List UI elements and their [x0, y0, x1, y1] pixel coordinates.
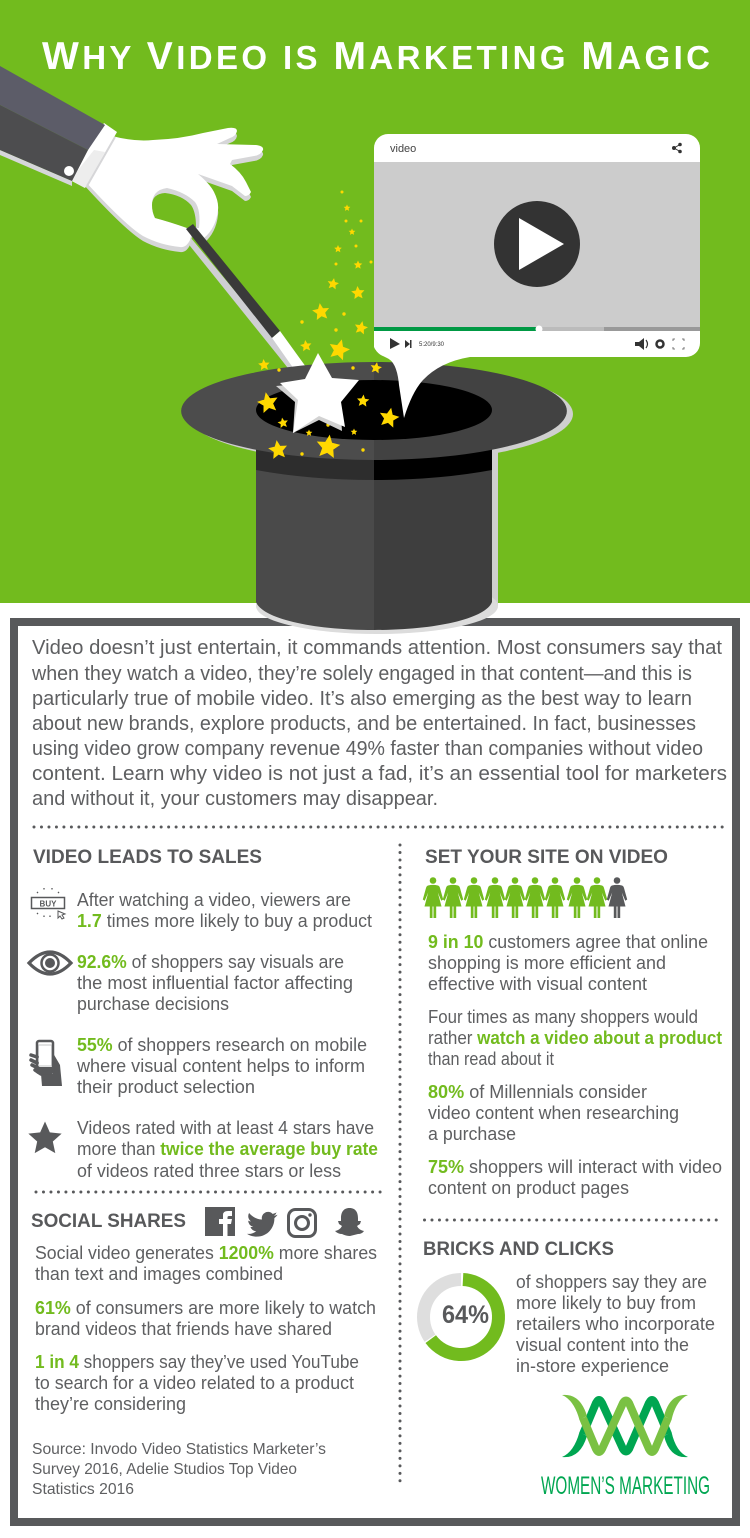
text: site stats: 75% shoppers will interact with video [428, 1157, 722, 1177]
text: site stats: than read about it [428, 1049, 554, 1069]
heading: social shares: SOCIAL SHARES [31, 1211, 186, 1232]
text: sales stats: where visual content helps to inform [76, 1056, 365, 1076]
text: site stats: rather watch a video about a product [428, 1028, 722, 1048]
intro paragraph: about new brands, explore products, and be entertained. In fact, businesses [32, 713, 696, 735]
text: social stats: they’re considering [35, 1394, 186, 1414]
wand shadow [186, 232, 302, 378]
text: sales stats: the most influential factor affecting [77, 973, 353, 993]
text: site stats: content on product pages [428, 1178, 629, 1198]
text: sales stats: 1.7 times more likely to buy a product [77, 911, 372, 931]
text: social stats: 1 in 4 shoppers say they’ve used YouTube [35, 1352, 359, 1372]
illustration: top hat [181, 362, 573, 634]
donut chart: 64%: 64% [442, 1301, 489, 1329]
logo mark: light wave [562, 1395, 688, 1452]
intro paragraph: using video grow company revenue 49% faster than companies without video [32, 738, 703, 760]
hat shadow [187, 365, 573, 634]
source note: Survey 2016, Adelie Studios Top Video [32, 1461, 297, 1478]
intro paragraph: Video doesn’t just entertain, it commands attention. Most consumers say that [32, 637, 722, 659]
player label: video [390, 143, 416, 155]
icon: snapchat [335, 1208, 364, 1236]
text: bricks and clicks stat: of shoppers say they are [516, 1272, 707, 1292]
share icon [672, 143, 681, 153]
icon: instagram [288, 1210, 316, 1236]
text: sales stats: 92.6% of shoppers say visuals are [77, 952, 344, 972]
progress bar [374, 326, 700, 332]
donut chart: 64% [422, 1278, 500, 1356]
text: sales stats: purchase decisions [77, 994, 229, 1014]
text: social stats: Social video generates 1200% more shares [35, 1243, 377, 1263]
intro paragraph: when they watch a video, they’re solely engaged in that content—and this is [31, 663, 692, 685]
player controls [390, 338, 684, 350]
cuff [70, 123, 117, 188]
heading: video leads to sales: VIDEO LEADS TO SALES [33, 847, 262, 868]
wand [186, 224, 307, 377]
icon: buy button: BUY [40, 900, 57, 908]
big white star on wand [276, 353, 359, 433]
hat band [256, 445, 492, 480]
heading: bricks and clicks: BRICKS AND CLICKS [423, 1239, 614, 1260]
text: bricks and clicks stat: in-store experience [516, 1356, 669, 1376]
intro paragraph: and without it, your customers may disappear. [32, 788, 438, 810]
video screen [374, 162, 700, 327]
text: site stats: a purchase [428, 1124, 516, 1144]
sleeve [0, 66, 105, 186]
heading: set your site on video: SET YOUR SITE ON VIDEO [425, 847, 668, 868]
text: sales stats: After watching a video, viewers are [77, 890, 351, 910]
text: social stats: than text and images combined [35, 1264, 283, 1284]
logo mark: dark wave [562, 1400, 688, 1457]
illustration: magician hand and wand [0, 66, 307, 378]
text: site stats [428, 932, 722, 1198]
intro paragraph: particularly true of mobile video. It’s also emerging as the best way to learn [32, 688, 692, 710]
text: social stats: to search for a video related to a product [35, 1373, 354, 1393]
text: social stats [35, 1243, 377, 1414]
text: social stats: 61% of consumers are more likely to watch [35, 1298, 376, 1318]
text: bricks and clicks stat: more likely to buy from [516, 1293, 696, 1313]
speech bubble tail [374, 335, 500, 418]
source note: Source: Invodo Video Statistics Marketer’s [32, 1441, 326, 1458]
text: sales stats [76, 890, 378, 1181]
text: sales stats: 55% of shoppers research on mobile [77, 1035, 367, 1055]
text: sales stats: more than twice the average buy rate [77, 1139, 378, 1159]
text: site stats: Four times as many shoppers would [428, 1007, 698, 1027]
text: site stats: 80% of Millennials consider [428, 1082, 647, 1102]
player frame [374, 134, 700, 357]
glove [84, 128, 263, 252]
text: sales stats: of videos rated three stars or less [77, 1161, 341, 1181]
icon: facebook [205, 1207, 235, 1236]
icon: star [28, 1122, 62, 1153]
text: sales stats: Videos rated with at least 4 stars have [77, 1118, 374, 1138]
player controls: 5:20/9:30 [419, 342, 445, 348]
text: site stats: video content when researching [428, 1103, 679, 1123]
text: bricks and clicks stat: retailers who incorporate [516, 1314, 715, 1334]
video player [374, 134, 700, 418]
text: bricks and clicks stat [516, 1272, 715, 1376]
text: site stats: effective with visual content [428, 974, 647, 994]
icon: hand holding phone [31, 1041, 62, 1086]
green header background [0, 0, 750, 603]
logo: Women's Marketing [541, 1395, 710, 1500]
intro paragraph [31, 637, 727, 810]
text: site stats: 9 in 10 customers agree that online [428, 932, 708, 952]
text: site stats: shopping is more efficient and [428, 953, 666, 973]
hat body [256, 470, 492, 630]
panel: main bordered panel [14, 622, 736, 1522]
source note [32, 1441, 326, 1498]
icon: eye [29, 952, 71, 974]
sparkles: yellow stars and dots [255, 190, 401, 459]
source note: Statistics 2016 [32, 1481, 134, 1498]
intro paragraph: content. Learn why video is not just a fad, it’s an essential tool for marketers [32, 763, 727, 785]
hat brim [181, 362, 567, 460]
play button [494, 201, 580, 287]
text: social stats: brand videos that friends have shared [35, 1319, 332, 1339]
icon: twitter [247, 1212, 277, 1237]
pictogram: 9 of 10 people [423, 877, 627, 918]
text: bricks and clicks stat: visual content into the [516, 1335, 689, 1355]
icon: buy button [32, 888, 65, 919]
title: WHY VIDEO IS MARKETING MAGIC [42, 35, 710, 78]
icons: social networks [205, 1207, 364, 1237]
text: sales stats: their product selection [77, 1077, 255, 1097]
